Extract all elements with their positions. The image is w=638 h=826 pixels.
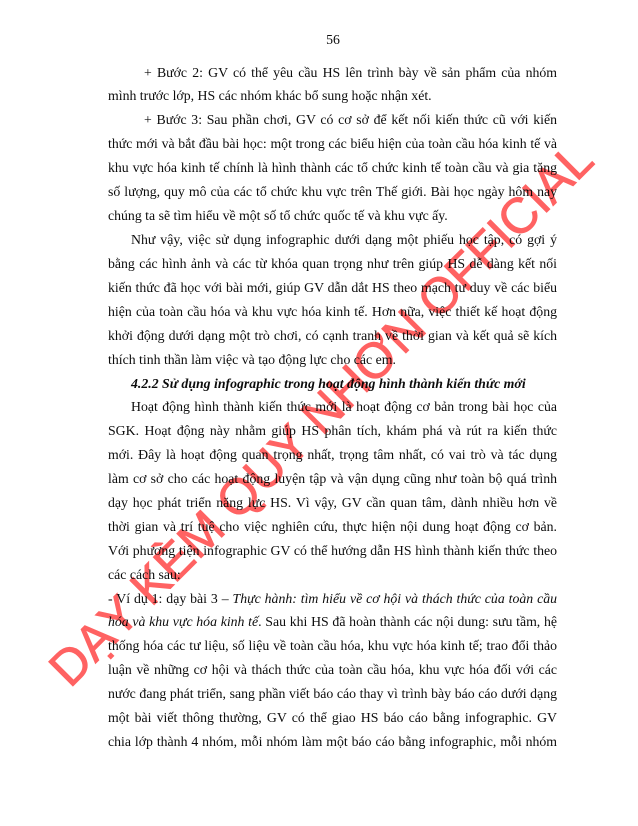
paragraph: example 1: - Ví dụ 1: dạy bài 3 – Thực hành: tìm hiểu về cơ hội và thách thức của toàn cầu <box>108 590 557 606</box>
paragraph: step 2: mình trước lớp, HS các nhóm khác bổ sung hoặc nhận xét. <box>108 88 432 103</box>
paragraph: knowledge-forming activity: các cách sau: <box>108 567 181 582</box>
paragraph: knowledge-forming activity: SGK. Hoạt động này nhằm giúp HS phân tích, khám phá và rút ra kiến thức <box>108 423 557 438</box>
paragraph: step 3: khu vực hóa kinh tế chính là hình thành các tổ chức kinh tế toàn cầu và gia tăng <box>108 160 557 175</box>
paragraph: infographic as worksheet: hiện của toàn cầu hóa và khu vực hóa kinh tế. Hơn nữa, việc thiết kế hoạt động <box>108 304 557 319</box>
paragraph: knowledge-forming activity: mới. Đây là hoạt động quan trọng nhất, trọng tâm nhất, có vai trò và tác dụng <box>108 447 557 462</box>
paragraph: infographic as worksheet: thích tinh thần làm việc và tạo động lực cho các em. <box>108 352 396 366</box>
paragraph: step 3: chúng ta sẽ tìm hiểu về một số tổ chức quốc tế và khu vực ấy. <box>108 208 448 223</box>
paragraph: example 1 <box>108 590 557 749</box>
paragraph: knowledge-forming activity: Với phương tiện infographic GV có thể hướng dẫn HS hình thành kiến thức theo <box>108 543 557 558</box>
paragraph: infographic as worksheet: khởi động dưới dạng một trò chơi, có cạnh tranh về thời gian và kết quả sẽ kích <box>108 328 557 343</box>
paragraph: example 1: thống hóa các tư liệu, số liệu về toàn cầu hóa, khu vực hóa kinh tế; trao đổi thảo <box>108 638 557 653</box>
paragraph: step 2 <box>108 64 557 103</box>
paragraph: knowledge-forming activity <box>108 399 557 582</box>
paragraph: knowledge-forming activity: làm cơ sở cho các hoạt động luyện tập và vận dụng cũng như toàn bộ quá trình <box>108 471 557 486</box>
paragraph: step 3: + Bước 3: Sau phần chơi, GV có cơ sở để kết nối kiến thức cũ với kiến <box>144 112 557 127</box>
paragraph: step 3: số lượng, quy mô của các tổ chức khu vực trên Thế giới. Bài học ngày hôm nay <box>108 184 557 199</box>
paragraph: example 1: hóa và khu vực hóa kinh tế. Sau khi HS đã hoàn thành các nội dung: sưu tầm, hệ <box>108 614 557 629</box>
paragraph: knowledge-forming activity: thời gian và trí tuệ cho việc nghiên cứu, thực hiện nội dung hoạt động cơ bản. <box>108 519 557 534</box>
section heading 4.2.2: 4.2.2 Sử dụng infographic trong hoạt động hình thành kiến thức mới <box>131 376 526 390</box>
paragraph: infographic as worksheet <box>108 232 557 367</box>
page number: 56 <box>326 32 340 47</box>
paragraph: knowledge-forming activity: dạy học phát triển năng lực HS. Vì vậy, GV cần quan tâm, dành nhiều hơn về <box>108 495 557 510</box>
paragraph: infographic as worksheet: kiến thức đã học với bài mới, giúp GV dẫn dắt HS theo mạch tư duy về các biểu <box>108 280 557 295</box>
paragraph: knowledge-forming activity: Hoạt động hình thành kiến thức mới là hoạt động cơ bản trong bài học của <box>131 399 557 414</box>
paragraph: example 1: chia lớp thành 4 nhóm, mỗi nhóm làm một báo cáo bằng infographic, mỗi nhóm <box>108 734 557 749</box>
paragraph: example 1: luận về những cơ hội và thách thức của toàn cầu hóa, khu vực hóa đối với các <box>108 662 557 677</box>
paragraph: infographic as worksheet: Như vậy, việc sử dụng infographic dưới dạng một phiếu học tập, có gợi ý <box>131 232 557 247</box>
paragraph: example 1: nước đang phát triển, sang phần viết báo cáo thay vì trình bày báo cáo dưới dạng <box>108 686 557 701</box>
paragraph: step 3 <box>108 112 557 223</box>
paragraph: step 3: thức mới và bắt đầu bài học: một trong các biểu hiện của toàn cầu hóa kinh tế và <box>108 136 557 151</box>
watermark: DẠY KÈM QUY NHƠN OFFICIAL <box>38 131 604 697</box>
paragraph: step 2: + Bước 2: GV có thể yêu cầu HS lên trình bày về sản phẩm của nhóm <box>144 64 557 80</box>
paragraph: infographic as worksheet: bằng các hình ảnh và các từ khóa quan trọng như trên giúp HS dễ dàng kết nối <box>108 256 557 271</box>
paragraph: example 1: một bài viết thông thường, GV có thể giao HS báo cáo bằng infographic. GV <box>108 710 557 725</box>
